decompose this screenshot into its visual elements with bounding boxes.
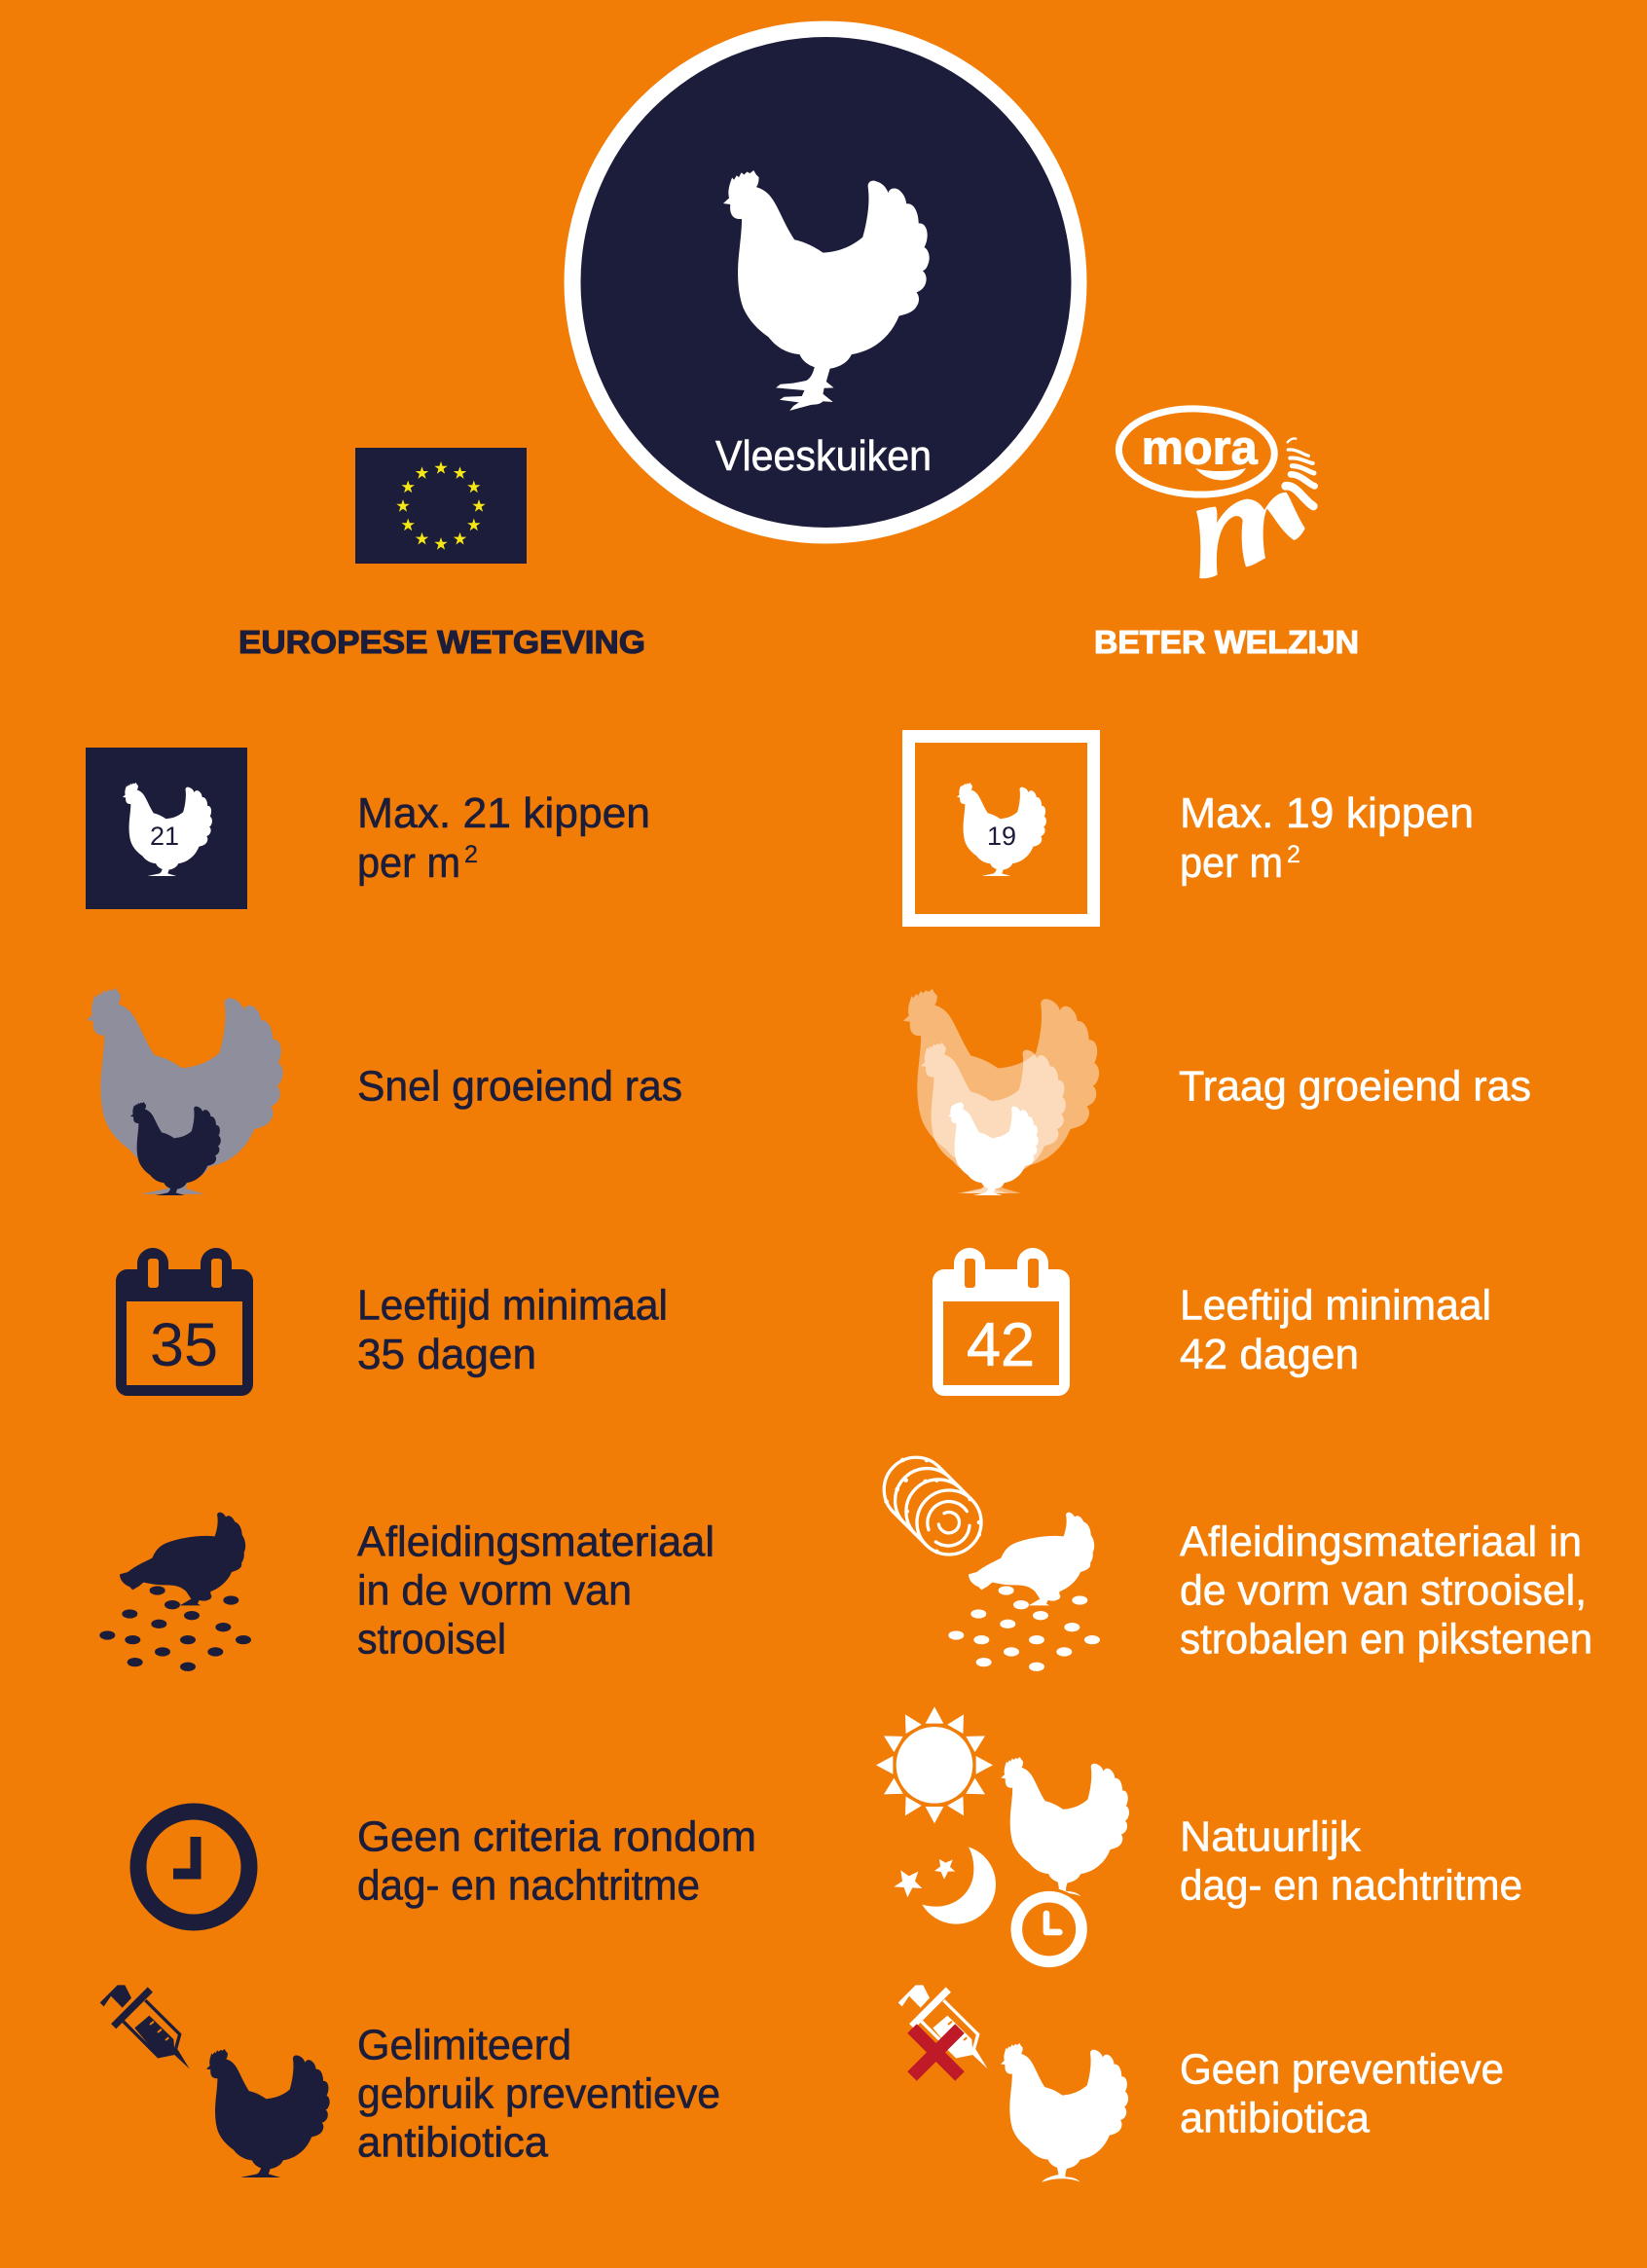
icon: straw bale and pecking chicken (884, 1457, 1100, 1671)
hero badge: Vleeskuiken (565, 21, 1086, 543)
icon: chicken (white) (1001, 2043, 1128, 2182)
chicken (1001, 1757, 1129, 1897)
text: max 19 (1180, 789, 1474, 887)
icon: 21 chickens per m2 (86, 748, 247, 909)
icon: chicken (navy) (206, 2049, 330, 2177)
text: max 21 (357, 789, 650, 887)
text: leeftijd 42: 42 dagen (1180, 1331, 1359, 1378)
icon: calendar 42 (933, 1248, 1070, 1396)
icon: hero chicken (723, 170, 930, 411)
label: Vleeskuiken: Vleeskuiken (715, 432, 932, 480)
moon and stars (894, 1847, 996, 1924)
text: afleidingsmateriaal rechts: de vorm van strooisel, (1180, 1567, 1587, 1614)
text: afleidingsmateriaal links: Afleidingsmateriaal (357, 1518, 714, 1565)
text: max 21: 2 (464, 841, 478, 868)
icon: calendar 35: 35 (150, 1311, 218, 1379)
text: max 21: Max. 21 kippen (357, 789, 650, 837)
text: leeftijd 42: Leeftijd minimaal (1180, 1281, 1491, 1330)
icon: 19 chickens per m2: 19 (987, 822, 1016, 851)
icon: EU flag (355, 448, 527, 564)
icon: slow growing breed (903, 989, 1099, 1195)
text: geen preventieve: Geen preventieve (1180, 2046, 1504, 2093)
text: gelimiteerd: Gelimiteerd (357, 2021, 571, 2069)
text: afleidingsmateriaal rechts: Afleidingsmateriaal in (1180, 1518, 1582, 1565)
text: geen preventieve: antibiotica (1180, 2095, 1371, 2141)
icon: calendar 42: 42 (967, 1311, 1035, 1379)
icon: mora logo: mora (1142, 421, 1258, 475)
clock (1009, 1889, 1088, 1969)
icon: fast growing breed (87, 988, 283, 1195)
text: max 19: per m (1180, 839, 1283, 887)
text: natuurlijk (1180, 1812, 1522, 1910)
text: afleidingsmateriaal links: strooisel (357, 1616, 506, 1663)
text: geen preventieve (1180, 2046, 1504, 2141)
text: gelimiteerd (357, 2021, 720, 2167)
icon: 21 chickens per m2: 21 (150, 822, 179, 851)
icon: sun, moon, chicken on clock (876, 1706, 1129, 1969)
text: afleidingsmateriaal rechts (1180, 1518, 1592, 1663)
icon: pecking chicken with litter (navy) (99, 1513, 251, 1671)
text: snel groeiend ras: Snel groeiend ras (357, 1063, 682, 1110)
icon: calendar 35 (116, 1248, 253, 1396)
text: leeftijd 35: 35 dagen (357, 1331, 536, 1378)
text: max 19: Max. 19 kippen (1180, 789, 1474, 837)
text: natuurlijk: Natuurlijk (1180, 1812, 1362, 1861)
text: geen criteria: dag- en nachtritme (357, 1861, 700, 1910)
heading: Europese wetgeving: EUROPESE WETGEVING (238, 624, 645, 660)
icon: syringe (navy) (100, 1985, 190, 2068)
text: max 21: per m (357, 839, 460, 887)
sun (876, 1706, 993, 1823)
icon: 19 chickens per m2 (909, 736, 1094, 921)
text: afleidingsmateriaal rechts: strobalen en pikstenen (1180, 1616, 1592, 1663)
icon: clock (138, 1811, 249, 1922)
icon: crossed out syringe (898, 1985, 988, 2076)
text: gelimiteerd: antibiotica (357, 2118, 549, 2167)
icon: mora logo (1117, 406, 1315, 578)
text: max 19: 2 (1287, 841, 1300, 868)
text: traag groeiend ras: Traag groeiend ras (1179, 1063, 1531, 1110)
text: natuurlijk: dag- en nachtritme (1180, 1861, 1522, 1910)
text: leeftijd 42 (1180, 1281, 1491, 1378)
text: leeftijd 35 (357, 1281, 668, 1378)
text: leeftijd 35: Leeftijd minimaal (357, 1281, 668, 1330)
text: geen criteria: Geen criteria rondom (357, 1812, 756, 1861)
text: geen criteria (357, 1812, 756, 1910)
heading: Beter welzijn: BETER WELZIJN (1094, 624, 1359, 660)
text: afleidingsmateriaal links: in de vorm van (357, 1567, 632, 1614)
text: afleidingsmateriaal links (357, 1518, 714, 1663)
text: gelimiteerd: gebruik preventieve (357, 2069, 720, 2118)
